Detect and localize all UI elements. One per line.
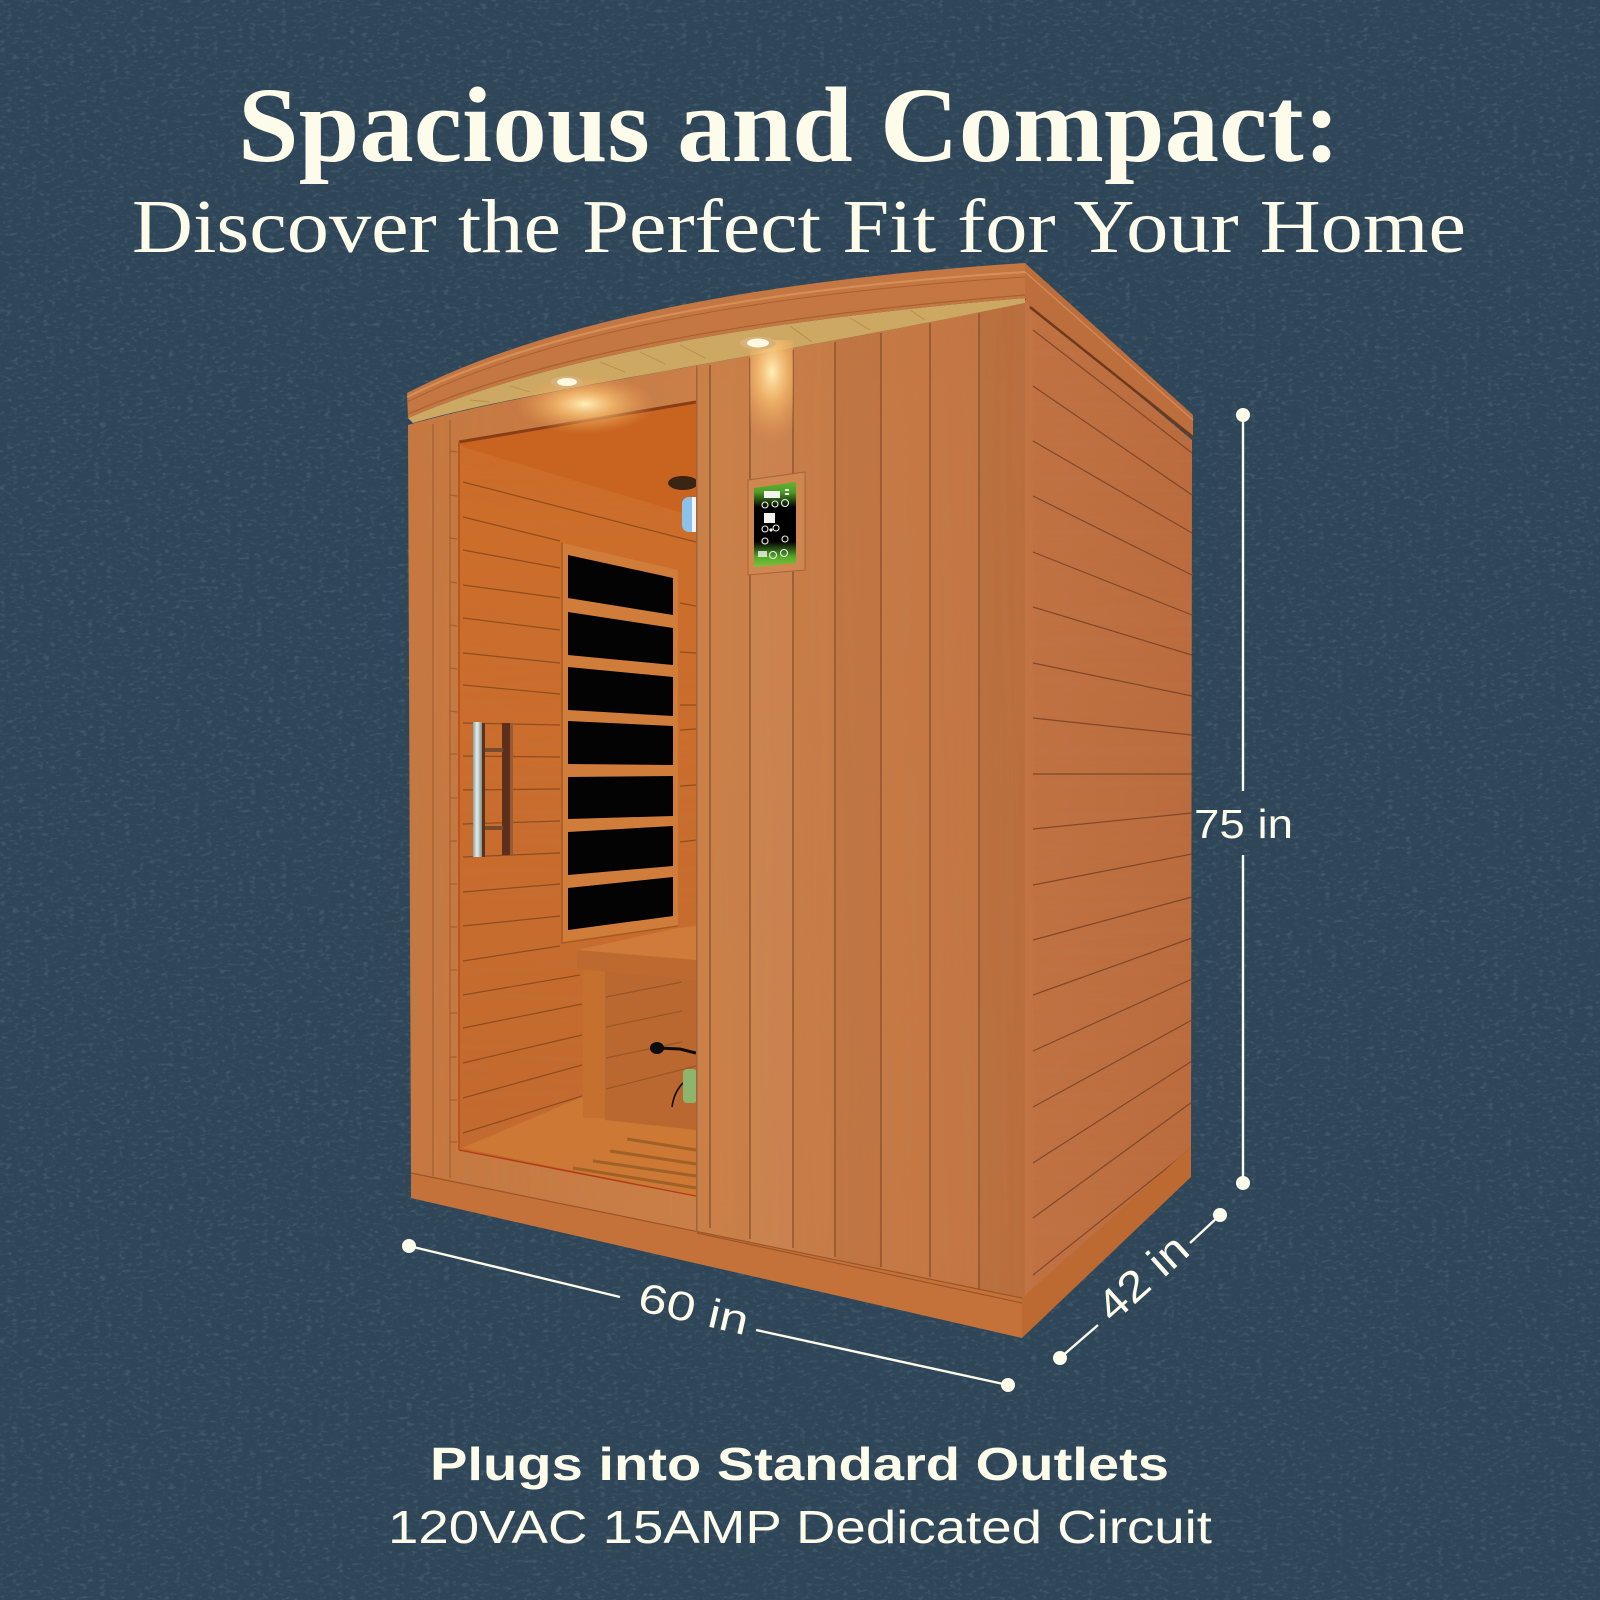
- dimension: width 60 in: [402, 1239, 1015, 1392]
- dimension: height 75 in: [1194, 408, 1293, 1190]
- dimension: height 75 in: 75 in: [1194, 801, 1293, 847]
- soffit: [408, 298, 1025, 423]
- interior wall plank lines: [463, 482, 696, 1133]
- infrared heater panel frame: [562, 543, 678, 943]
- sauna cabin illustration: [405, 263, 1195, 1338]
- subtitle: Discover the Perfect Fit for Your Home: [132, 185, 1466, 269]
- title: Spacious and Compact:: [238, 67, 1340, 185]
- under-bench recess: [605, 970, 696, 1130]
- interior ceiling: [459, 402, 696, 517]
- control panel: [748, 472, 805, 575]
- ceiling speaker: [668, 476, 698, 490]
- roof side cornice: [1025, 263, 1193, 437]
- lamp fixture: [682, 497, 696, 532]
- ceiling light right: [740, 336, 776, 350]
- door-side panel with vertical grooves: [696, 313, 979, 1289]
- interior seen through glass door: [455, 400, 700, 1200]
- roof fascia: [407, 263, 1025, 418]
- door handle: [473, 722, 513, 857]
- infrared heater panels: [568, 555, 673, 930]
- light glow right: [750, 340, 793, 430]
- floor slats: [573, 1139, 696, 1188]
- dimension: depth 42 in: [1053, 1208, 1227, 1365]
- light glow left: [515, 374, 655, 434]
- door frame ticks: [450, 451, 457, 1142]
- front wall: [405, 300, 1030, 1305]
- side wall with horizontal planks: [1020, 290, 1195, 1305]
- caption detail: 120VAC 15AMP Dedicated Circuit: [388, 1501, 1212, 1553]
- power plug and cord: [650, 1042, 697, 1107]
- front plinth: [411, 1173, 1022, 1338]
- dimension: depth 42 in: 42 in: [1088, 1225, 1198, 1331]
- bench post: [583, 968, 605, 1118]
- ceiling light left: [551, 376, 583, 388]
- side plinth: [1022, 1147, 1191, 1338]
- header shadow line: [459, 402, 696, 442]
- floor: [462, 1097, 696, 1196]
- caption heading: Plugs into Standard Outlets: [430, 1438, 1169, 1490]
- dimension: width 60 in: 60 in: [634, 1274, 753, 1344]
- bench: [577, 926, 696, 980]
- door frame grooves: [433, 420, 450, 1178]
